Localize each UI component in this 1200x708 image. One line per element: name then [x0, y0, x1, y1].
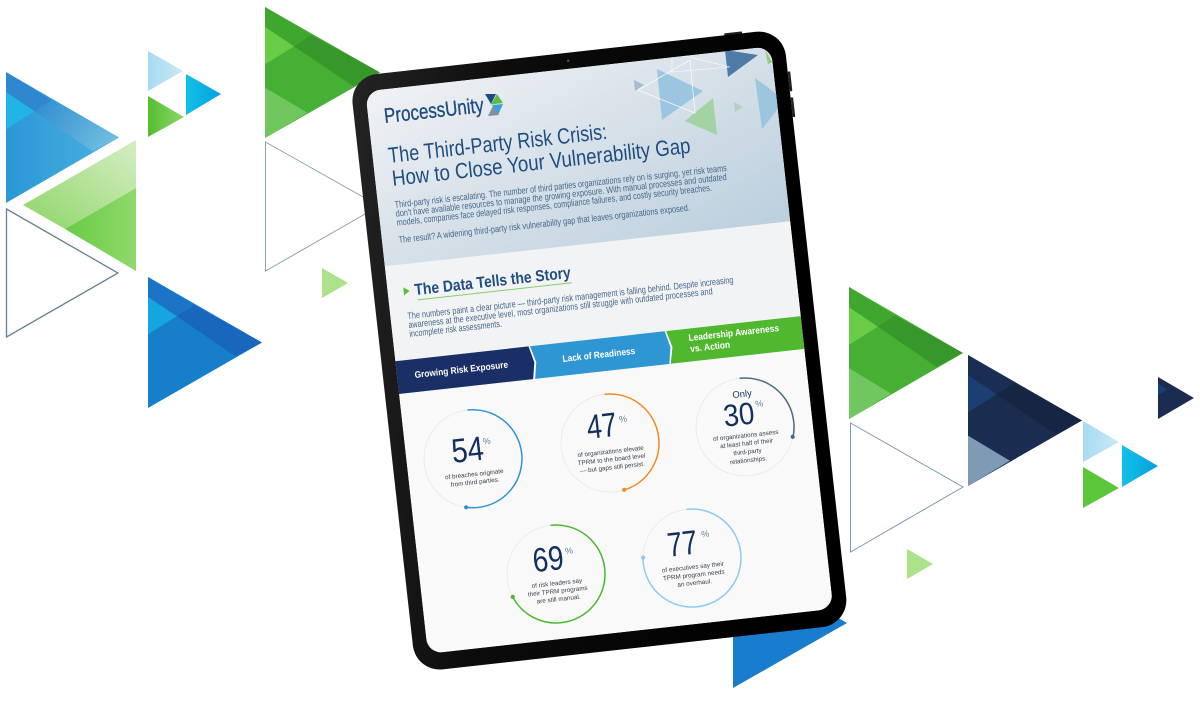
triangle: outline left: [6, 209, 118, 337]
stat: only 30%: Only: [732, 388, 753, 401]
stat: 54%: 54: [450, 430, 486, 471]
section text: awareness at the executive level, most organizations still struggle with outdated processes and: [408, 285, 713, 330]
stat: 77%: an overhaul.: [677, 578, 713, 589]
screen background: [365, 46, 833, 654]
stat: only 30%: at least half of their: [720, 437, 773, 450]
intro text: The result? A widening third-party risk vulnerability gap that leaves organizations exposed.: [398, 202, 690, 245]
stat: only 30%: relationships.: [730, 455, 768, 466]
section background: [385, 221, 801, 362]
stat: 69%: 69: [531, 539, 566, 580]
stat: 47%: — but gaps still persist.: [580, 461, 645, 475]
triangle: green small right: [1083, 467, 1119, 508]
triangle: green top: [265, 7, 380, 138]
stat: 47%: [556, 389, 664, 498]
stat: only 30%: %: [755, 398, 764, 409]
section arrow: [403, 287, 410, 295]
stat: 54%: of breaches originate: [445, 468, 504, 481]
tabs: [395, 316, 804, 394]
intro text: Third-party risk is escalating. The number of third parties organizations rely on is surging, yet risk teams: [394, 162, 727, 210]
stat: 77%: [636, 504, 746, 612]
stat: only 30%: of organizations assess: [713, 429, 779, 443]
logo mark: [485, 94, 503, 116]
triangle: green right: [849, 287, 963, 419]
logo wordmark: ProcessUnity: [383, 94, 485, 128]
section text: The numbers paint a clear picture — third-party risk management is falling behind. Despite increasing: [407, 274, 734, 321]
triangle: lime small left: [322, 268, 348, 298]
triangle: lime small right: [907, 549, 933, 579]
tab: lack of readiness: [530, 331, 672, 379]
title: How to Close Your Vulnerability Gap: [391, 133, 692, 191]
intro text: models, companies face delayed risk responses, compliance failures, and costly security breaches.: [396, 182, 712, 228]
triangle: cyan small left: [186, 74, 221, 115]
section heading: The Data Tells the Story: [414, 265, 572, 299]
tab: growing risk exposure: [395, 346, 536, 394]
header band: [365, 46, 790, 266]
stat: 69%: are still manual.: [536, 594, 581, 606]
stat: only 30%: 30: [721, 395, 756, 434]
tab labels: [413, 322, 781, 385]
camera: [567, 59, 569, 62]
stat: 69%: of risk leaders say: [531, 577, 583, 590]
tablet body: [350, 29, 849, 672]
tablet: [349, 27, 852, 672]
stat: 47%: TPRM to the board level: [577, 453, 646, 467]
triangle: blue lower left: [148, 277, 262, 408]
triangle: outline right: [850, 423, 963, 552]
stat: 69%: %: [564, 545, 573, 556]
tab labels: vs. Action: [690, 339, 731, 354]
triangle: cyan small right: [1122, 445, 1158, 487]
heading underline: [418, 282, 572, 300]
header decorative triangles: [634, 50, 785, 135]
tablet side buttons: [724, 27, 795, 124]
triangle: large green pointing left: [23, 140, 136, 271]
stat: 54%: [419, 405, 527, 513]
triangle: light blue small right: [1083, 421, 1119, 462]
triangle: navy right: [968, 355, 1082, 486]
intro text: don't have available resources to manage the growing exposure. With manual processes and outdated: [395, 171, 727, 219]
stat: 69%: their TPRM programs: [528, 585, 588, 598]
section text: incomplete risk assessments.: [409, 318, 502, 339]
stat: 47%: 47: [585, 406, 619, 447]
stat: 47%: %: [619, 413, 628, 424]
stat: 54%: from third parties.: [450, 476, 500, 489]
triangle: blue left: [6, 72, 119, 203]
triangle: outline top: [266, 142, 379, 271]
tab labels: Leadership Awareness: [688, 322, 780, 343]
tab labels: Lack of Readiness: [562, 345, 636, 364]
stat: only 30%: [691, 373, 799, 481]
stat: 77%: %: [701, 529, 710, 539]
triangle: green small left: [148, 96, 184, 137]
intro text: [394, 162, 731, 245]
stat: 47%: of organizations elevate: [577, 445, 645, 459]
stat: 77%: 77: [665, 524, 699, 565]
stat: only 30%: third-party: [733, 447, 763, 457]
stat: 69%: [502, 520, 610, 628]
stat: 77%: of executives say their: [662, 561, 724, 574]
title: The Third-Party Risk Crisis:: [387, 119, 608, 168]
triangle: blue behind tablet: [733, 558, 847, 688]
triangle: light blue small left: [148, 51, 183, 91]
triangle: navy small right: [1158, 377, 1194, 419]
title: [387, 110, 692, 191]
tab labels: Growing Risk Exposure: [414, 359, 509, 380]
stat: 54%: %: [482, 436, 491, 447]
stat: 77%: TPRM program needs: [663, 569, 725, 582]
tab: leadership awareness: [666, 316, 804, 364]
screen: [364, 33, 847, 654]
